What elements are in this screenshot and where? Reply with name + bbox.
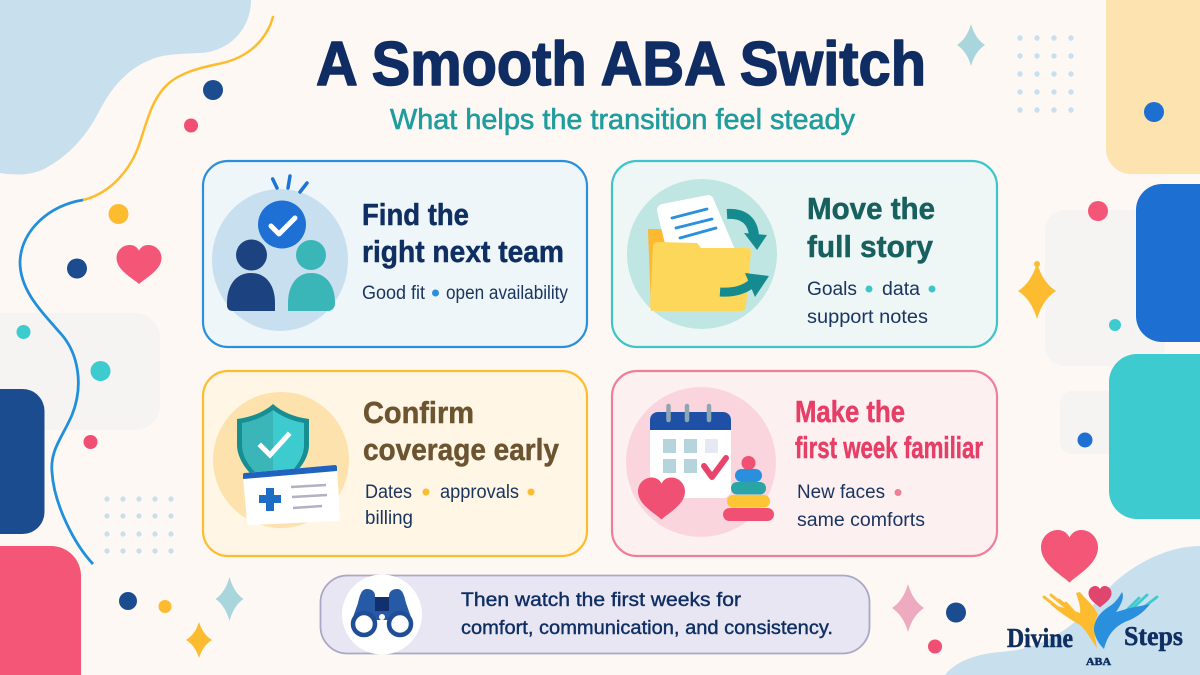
right background decoration — [892, 0, 1200, 675]
details: same comforts — [797, 510, 925, 531]
details: open availability — [446, 283, 568, 304]
logo: Divine Steps ABA: Divine — [1007, 623, 1073, 653]
icon: calendar, heart and stacking toy — [626, 387, 776, 537]
icon: team with check badge — [212, 176, 348, 331]
details: Good fit — [362, 283, 426, 304]
icon: shield and insurance card — [213, 392, 349, 528]
panel: move the full story: full story — [807, 229, 934, 264]
details: New faces — [797, 482, 885, 503]
callout text: comfort, communication, and consistency. — [461, 617, 833, 639]
panel: make the first week familiar: first week familiar — [795, 430, 983, 465]
panel: confirm coverage early: coverage early — [363, 432, 560, 467]
details — [365, 482, 534, 529]
details: data — [882, 279, 920, 300]
heading: Find the — [362, 197, 469, 232]
heading: Move the — [807, 191, 935, 226]
panel: confirm coverage early — [203, 371, 587, 556]
title: A Smooth ABA Switch — [316, 30, 926, 99]
details — [807, 279, 936, 328]
heading: Confirm — [363, 395, 474, 430]
details — [362, 283, 568, 304]
left background decoration — [0, 0, 273, 675]
details: billing — [365, 508, 413, 529]
details: approvals — [440, 482, 519, 503]
panel: move the full story — [612, 161, 997, 347]
details: Dates — [365, 482, 412, 503]
panel: find the right next team — [203, 161, 587, 347]
details — [797, 482, 925, 531]
panel: make the first week familiar — [612, 371, 997, 556]
logo: Divine Steps ABA — [1007, 586, 1183, 668]
logo: Divine Steps ABA: Steps — [1124, 621, 1183, 651]
callout text: Then watch the first weeks for — [461, 589, 742, 611]
icon: binoculars — [342, 574, 422, 654]
details: support notes — [807, 307, 928, 328]
details: Goals — [807, 279, 857, 300]
heading: Make the — [795, 394, 905, 429]
logo: Divine Steps ABA: ABA — [1086, 656, 1111, 668]
icon: folder with document and arrows — [627, 179, 777, 329]
subtitle: What helps the transition feel steady — [390, 104, 855, 136]
callout text — [461, 589, 833, 639]
panel: find the right next team: right next team — [362, 234, 564, 269]
callout bar — [320, 574, 870, 654]
